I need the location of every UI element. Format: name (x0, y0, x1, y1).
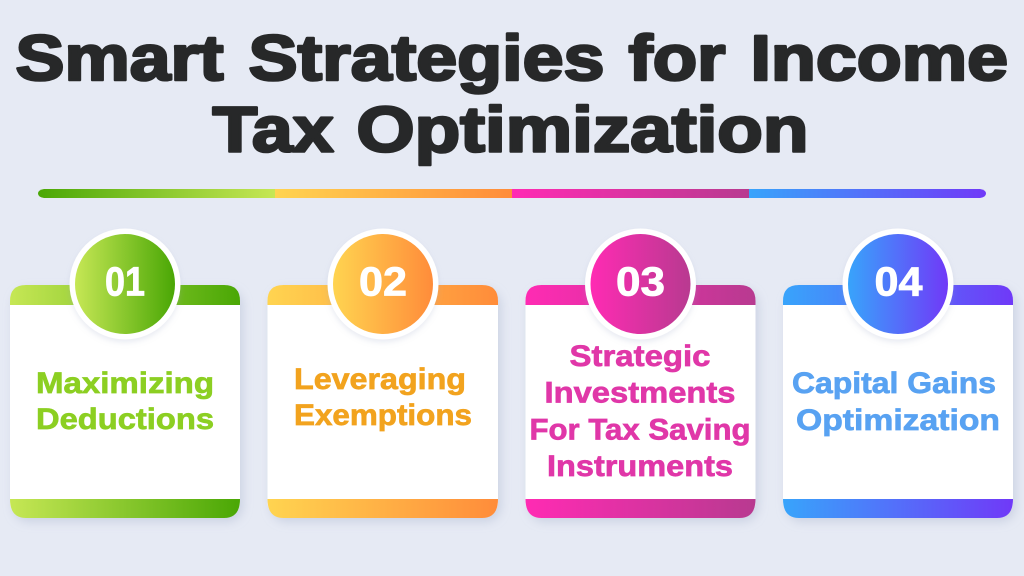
card bottom band (783, 499, 1013, 518)
card label (294, 363, 472, 432)
card body (526, 285, 756, 518)
card label (792, 367, 1000, 437)
panel: 02 Leveraging Exemptions (268, 228, 498, 518)
card label: Maximizing (36, 367, 214, 400)
card label: Leveraging (294, 363, 466, 396)
card top band (10, 285, 240, 305)
title: Optimization (356, 94, 808, 166)
card body (783, 285, 1013, 518)
number badge: 02 (359, 258, 407, 304)
panel: 01 Maximizing Deductions (10, 228, 240, 518)
title: Strategies (248, 22, 604, 94)
title (16, 22, 1008, 166)
card label (36, 367, 214, 436)
card top band (526, 285, 756, 305)
card body (268, 285, 498, 518)
card label (530, 340, 750, 483)
title: Income (750, 22, 1008, 94)
card bottom band (526, 499, 756, 518)
panel: 04 Capital Gains Optimization (783, 228, 1013, 518)
panel: 03 Strategic Investments (526, 228, 756, 518)
number badge (842, 228, 954, 340)
card label: Deductions (36, 403, 214, 436)
number badge: 03 (616, 258, 665, 304)
card label: Optimization (796, 404, 1000, 437)
number badge: 01 (105, 258, 145, 304)
card top band (783, 285, 1013, 305)
card label: Exemptions (294, 399, 472, 432)
card label: Investments (544, 376, 736, 410)
card top band (268, 285, 498, 305)
number badge: 04 (874, 258, 923, 304)
card label: Instruments (547, 450, 733, 483)
card bottom band (10, 499, 240, 518)
card bottom band (268, 499, 498, 518)
card body (10, 285, 240, 518)
title: for (628, 22, 726, 94)
card label: Capital Gains (792, 367, 996, 400)
number badge (328, 228, 438, 340)
card label: Strategic (570, 340, 710, 373)
number badge (70, 228, 180, 340)
gradient divider bar (38, 189, 986, 198)
title: Tax (212, 94, 334, 166)
title: Smart (16, 22, 224, 94)
card label: For Tax Saving (530, 414, 750, 446)
number badge (585, 228, 696, 340)
